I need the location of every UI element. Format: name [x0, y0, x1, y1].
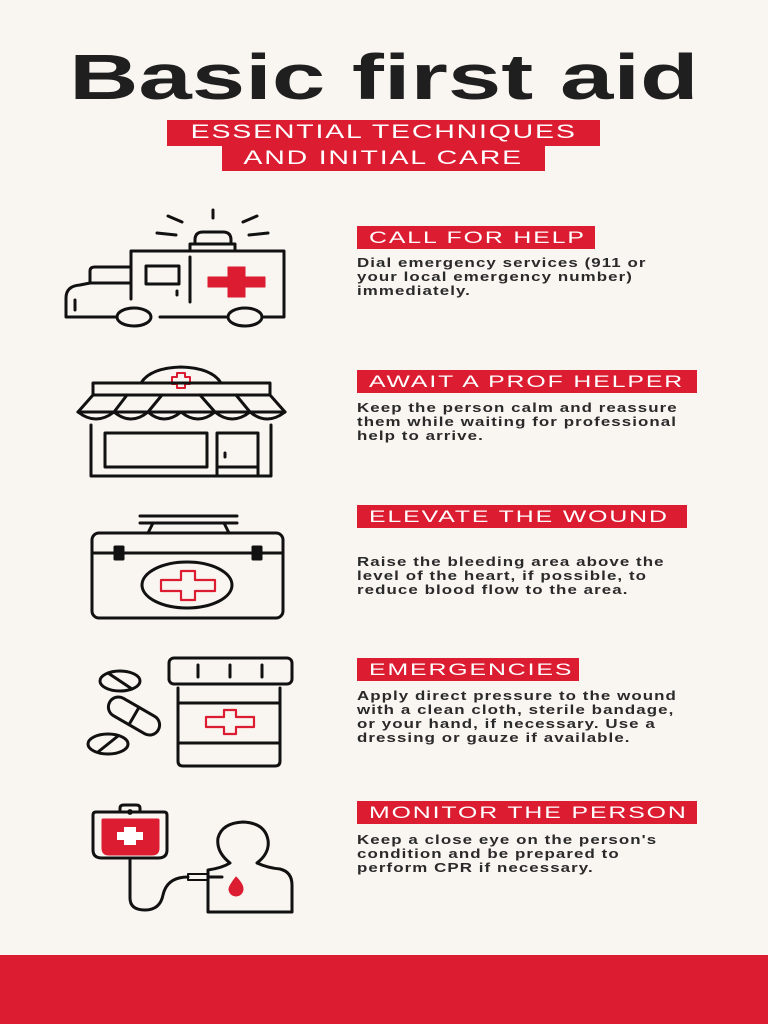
- text: monitor: [357, 833, 657, 875]
- footer band: [0, 955, 768, 1024]
- subtitle line 1: ESSENTIAL TECHNIQUES: [190, 122, 577, 143]
- icon: IV drip and patient: [93, 805, 292, 912]
- text: await: help to arrive.: [357, 429, 484, 443]
- text: monitor: Keep a close eye on the person's: [357, 833, 657, 847]
- text: call for help: [357, 256, 647, 298]
- text: emergencies: Apply direct pressure to the wound: [357, 689, 677, 703]
- label: emergencies: EMERGENCIES: [369, 660, 573, 679]
- text: elevate: Raise the bleeding area above the: [357, 555, 665, 569]
- text: emergencies: with a clean cloth, sterile bandage,: [357, 703, 674, 717]
- text: elevate: level of the heart, if possible, to: [357, 569, 647, 583]
- text: await: them while waiting for professional: [357, 415, 677, 429]
- text: call for help: immediately.: [357, 284, 471, 298]
- icon: ambulance: [66, 210, 284, 326]
- text: elevate: reduce blood flow to the area.: [357, 583, 628, 597]
- text: monitor: perform CPR if necessary.: [357, 861, 594, 875]
- label: monitor the person: MONITOR THE PERSON: [369, 803, 688, 822]
- text: emergencies: or your hand, if necessary. Use a: [357, 717, 656, 731]
- icon: pills and bottle: [88, 658, 292, 766]
- text: monitor: condition and be prepared to: [357, 847, 620, 861]
- subtitle line 2: AND INITIAL CARE: [244, 148, 523, 169]
- label: call for help: CALL FOR HELP: [369, 228, 586, 247]
- text: await: Keep the person calm and reassure: [357, 401, 678, 415]
- icon: first aid kit: [92, 516, 283, 618]
- title: Basic first aid: [69, 41, 699, 113]
- icon: pharmacy store: [78, 367, 285, 476]
- text: await: [357, 401, 678, 443]
- text: call for help: Dial emergency services (911 or: [357, 256, 647, 270]
- label: elevate the wound: ELEVATE THE WOUND: [369, 507, 669, 526]
- text: elevate: [357, 555, 665, 597]
- text: emergencies: [357, 689, 677, 745]
- text: call for help: your local emergency number): [357, 270, 633, 284]
- text: emergencies: dressing or gauze if available.: [357, 731, 631, 745]
- label: await a prof helper: AWAIT A PROF HELPER: [369, 372, 684, 391]
